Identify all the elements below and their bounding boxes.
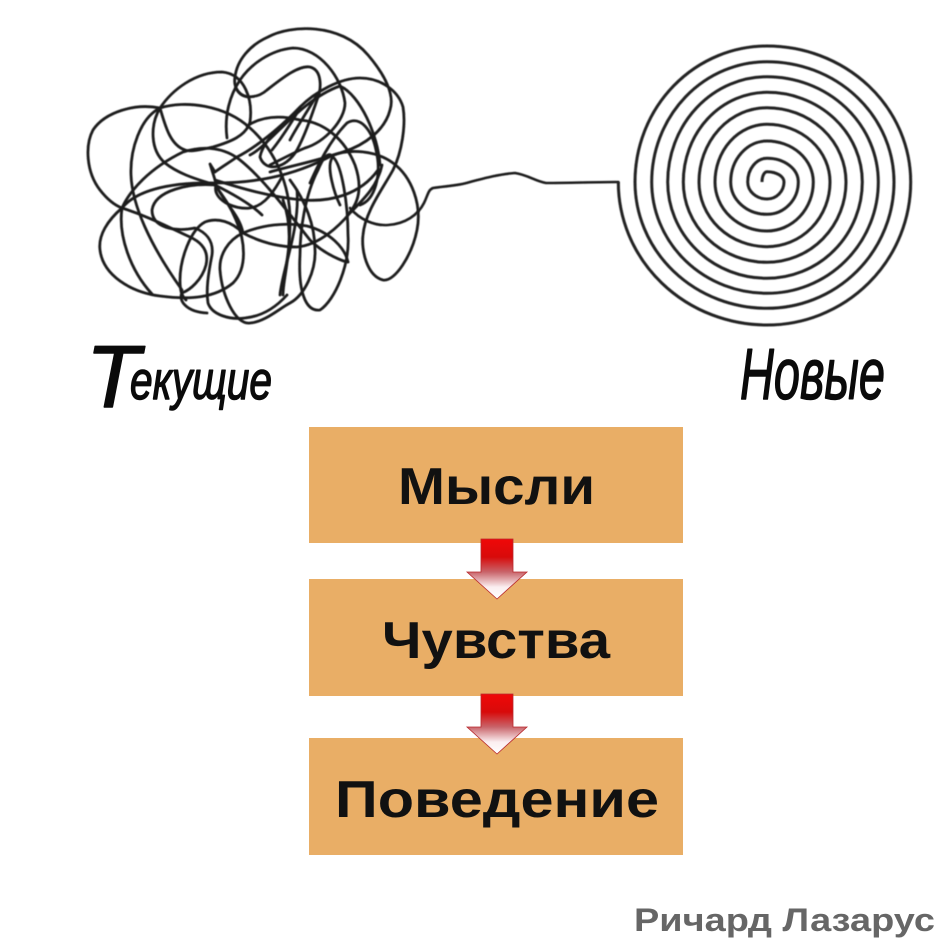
connecting line — [350, 173, 618, 225]
box: thoughts — [309, 427, 683, 543]
box: feelings: Чувства — [382, 612, 611, 670]
box: behaviour — [309, 738, 683, 855]
label: current — [86, 327, 272, 426]
icon: spiral — [618, 46, 911, 325]
arrow: feelings to behaviour — [467, 694, 527, 754]
box: thoughts: Мысли — [398, 458, 595, 516]
label: current: екущие — [130, 351, 272, 411]
icon: tangled scribble — [88, 29, 418, 323]
box: behaviour: Поведение — [335, 771, 659, 829]
label: current: Т — [86, 327, 145, 426]
author credit: Ричард Лазарус — [634, 902, 935, 938]
box: feelings — [309, 579, 683, 696]
arrow: thoughts to feelings — [467, 539, 527, 599]
